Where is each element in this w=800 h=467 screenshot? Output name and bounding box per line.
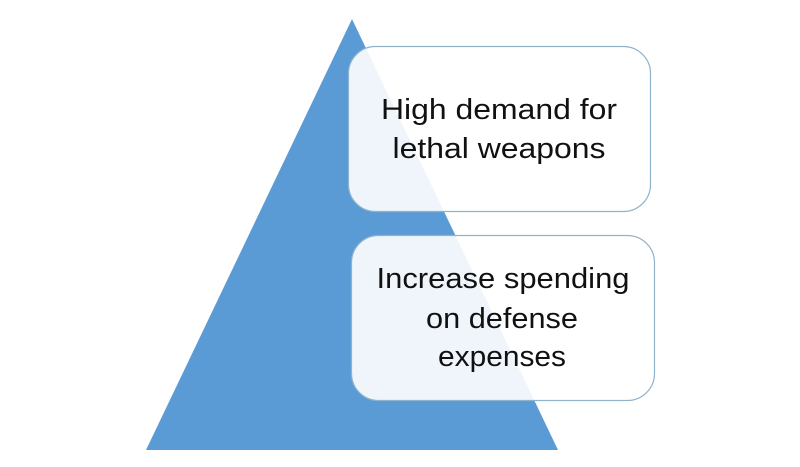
pyramid triangle (146, 19, 558, 450)
card: high demand for lethal weapons (348, 46, 650, 212)
card: increase spending on defense expenses: on defense (426, 303, 578, 335)
card: increase spending on defense expenses: Increase spending (376, 263, 630, 295)
card: increase spending on defense expenses (352, 236, 654, 400)
card: increase spending on defense expenses: expenses (438, 341, 566, 373)
card: high demand for lethal weapons: lethal weapons (392, 133, 606, 165)
card: high demand for lethal weapons: High demand for (381, 94, 617, 126)
